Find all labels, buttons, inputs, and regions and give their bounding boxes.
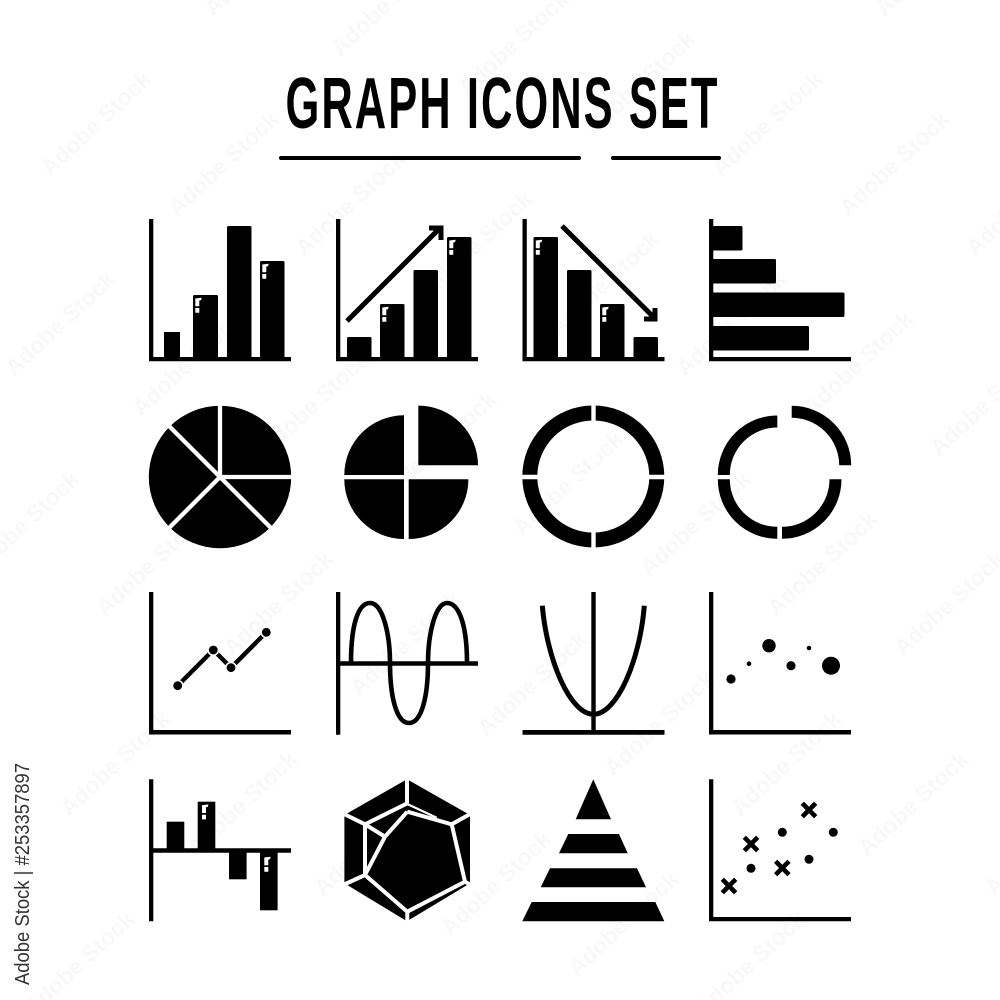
watermark pattern: Adobe Stock (762, 506, 882, 621)
watermark pattern: Adobe Stock (436, 826, 556, 941)
side credit text: Adobe Stock | #253357897 (12, 763, 34, 985)
dot markers (746, 828, 838, 873)
cross markers (722, 803, 816, 893)
watermark pattern: Adobe Stock (309, 786, 429, 901)
watermark pattern: Adobe Stock (563, 866, 683, 981)
axes (522, 219, 664, 361)
watermark pattern: Adobe Stock (853, 746, 973, 861)
watermark pattern: Adobe Stock (707, 66, 827, 181)
axes (149, 219, 291, 361)
icon: bar chart with down arrow (522, 219, 664, 361)
watermark pattern: Adobe Stock (671, 266, 791, 381)
bars (167, 802, 278, 910)
watermark pattern: Adobe Stock (599, 666, 719, 781)
bar highlights (382, 240, 456, 322)
watermark pattern: Adobe Stock (254, 346, 374, 461)
bars (164, 226, 284, 358)
watermark pattern: Adobe Stock (834, 106, 954, 221)
axes (336, 592, 478, 735)
icon: sine wave (336, 592, 478, 735)
watermark pattern: Adobe Stock (417, 186, 537, 301)
line series (178, 632, 266, 686)
icon: pyramid chart (522, 779, 664, 921)
bubbles (726, 639, 840, 684)
icon: pie chart (149, 398, 298, 548)
axes (522, 592, 664, 735)
watermark pattern: Adobe Stock (218, 546, 338, 661)
watermark pattern: Adobe Stock (381, 386, 501, 501)
icon: parabola (522, 592, 664, 735)
watermark pattern: Adobe Stock (635, 466, 755, 581)
watermark pattern: Adobe Stock (163, 106, 283, 221)
bar highlights (195, 264, 269, 313)
watermark pattern: Adobe Stock (580, 26, 700, 141)
watermark pattern: Adobe Stock (127, 306, 247, 421)
watermark pattern: Adobe Stock (182, 746, 302, 861)
axes (149, 592, 291, 734)
watermark pattern: Adobe Stock (290, 146, 410, 261)
data points (172, 626, 272, 692)
watermark pattern: Adobe Stock (36, 66, 156, 181)
watermark pattern: Adobe Stock (55, 706, 175, 821)
wave (351, 603, 467, 723)
watermark pattern: Adobe Stock (798, 306, 918, 421)
curve (542, 606, 644, 714)
icon: exploded donut chart (724, 412, 845, 533)
axes (149, 779, 291, 921)
bars (347, 237, 472, 358)
up arrow (347, 228, 441, 321)
axes (709, 219, 851, 361)
bar highlights (202, 804, 271, 872)
watermark pattern: Adobe Stock (91, 506, 211, 621)
icon: bar chart with up arrow (336, 219, 478, 361)
watermark pattern: Adobe Stock (0, 266, 120, 381)
watermark pattern: Adobe Stock (726, 706, 846, 821)
bars (712, 226, 844, 350)
watermark pattern: Adobe Stock (508, 426, 628, 541)
axes (336, 219, 478, 361)
watermark pattern: Adobe Stock (345, 586, 465, 701)
icon: scatter plot (709, 779, 851, 921)
axes (709, 592, 851, 734)
icon: radar hexagon chart (342, 778, 472, 923)
title: GRAPH ICONS SET (286, 63, 718, 144)
axes (709, 779, 851, 921)
icon: bubble chart (709, 592, 851, 734)
title underline (281, 156, 719, 160)
watermark pattern: Adobe Stock (472, 626, 592, 741)
down arrow (562, 226, 655, 319)
bars (534, 237, 658, 358)
bar highlights (536, 240, 609, 322)
icon: positive and negative bar chart (149, 779, 291, 921)
icon: horizontal bar chart (709, 219, 851, 361)
icon: line chart (149, 592, 291, 734)
icon: exploded quarter pie chart (344, 406, 478, 539)
icon: segmented donut chart (515, 400, 672, 553)
icon: rising bar chart (149, 219, 291, 361)
watermark pattern: Adobe Stock (544, 226, 664, 341)
